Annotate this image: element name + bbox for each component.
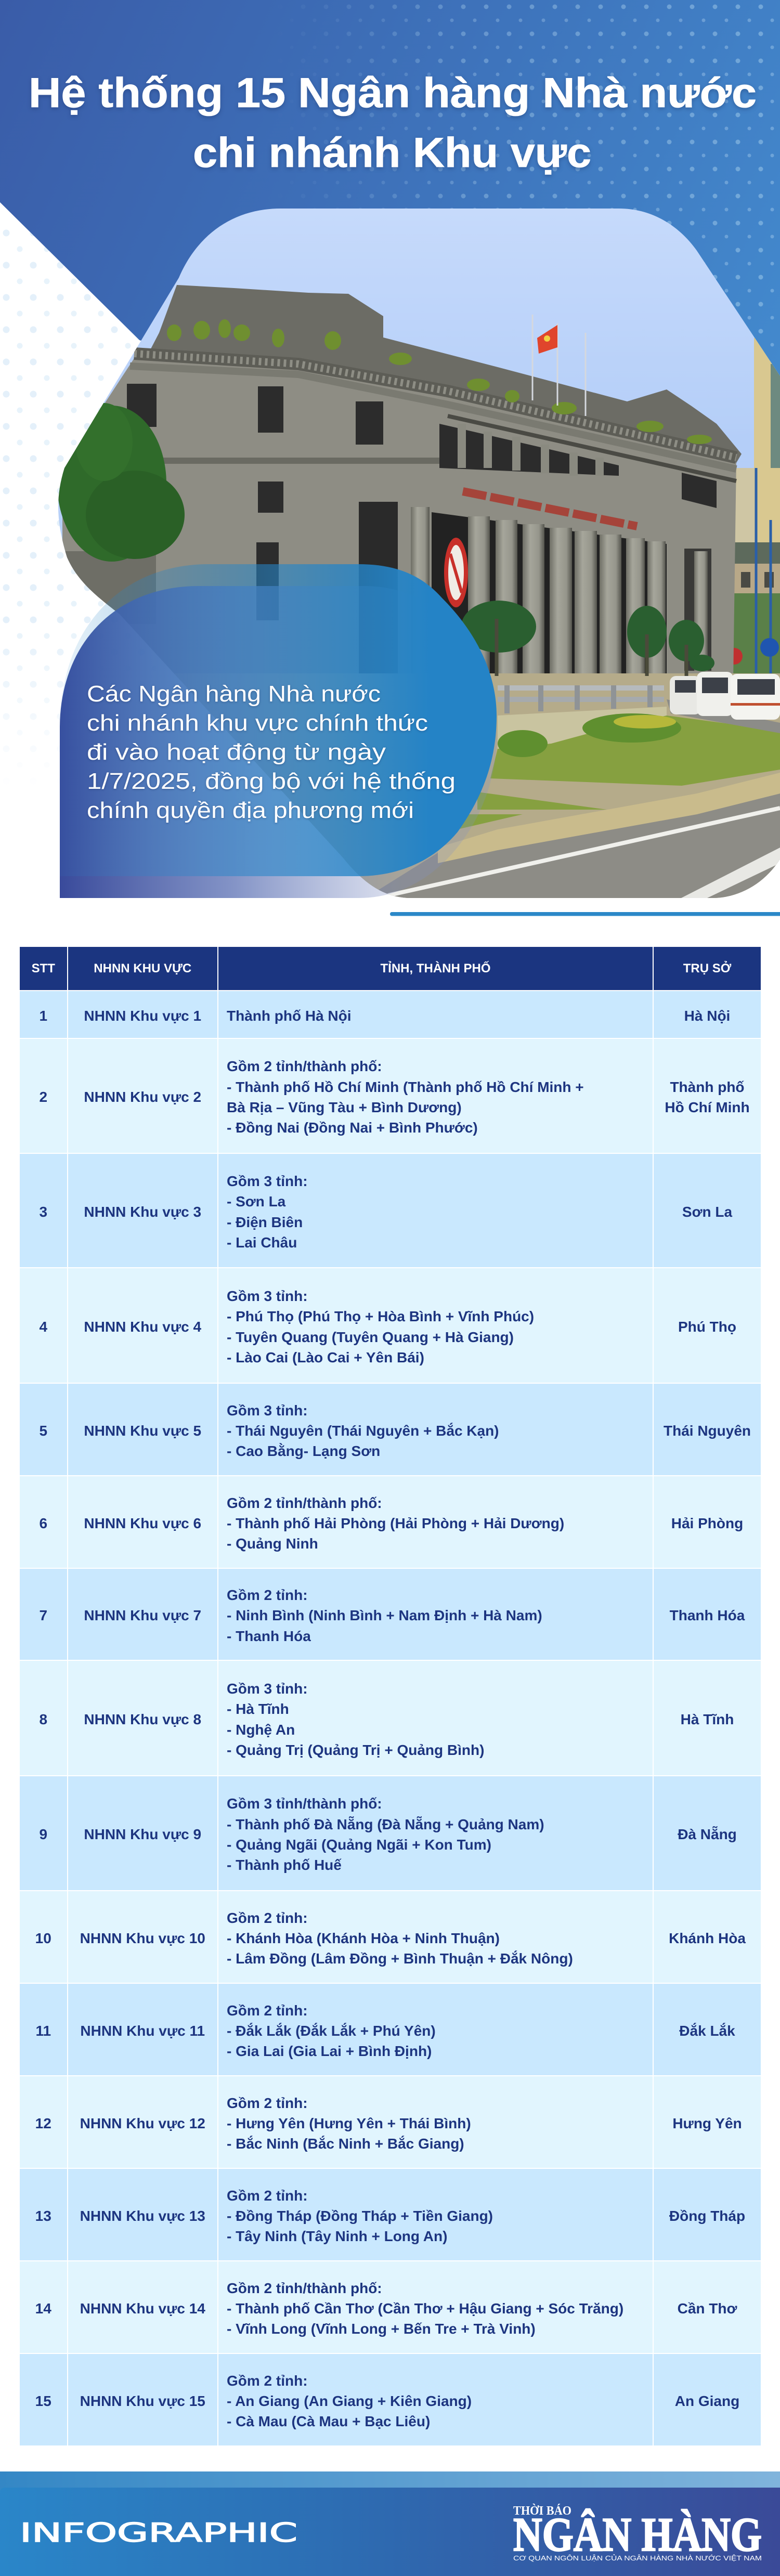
row 12: - Bắc Ninh (Bắc Ninh + Bắc Giang) <box>227 2136 464 2152</box>
row 1 <box>20 991 761 1038</box>
row 6: NHNN Khu vực 6 <box>84 1515 201 1531</box>
row 15: An Giang <box>675 2393 739 2409</box>
row 14: Gồm 2 tỉnh/thành phố: <box>227 2280 382 2296</box>
row 14: - Thành phố Cần Thơ (Cần Thơ + Hậu Giang + Sóc Trăng) <box>227 2300 623 2317</box>
row 4: NHNN Khu vực 4 <box>84 1319 201 1335</box>
upper windows <box>127 384 717 620</box>
row 13: - Tây Ninh (Tây Ninh + Long An) <box>227 2228 447 2244</box>
dark entrance <box>359 502 398 673</box>
row 15: - Cà Mau (Cà Mau + Bạc Liêu) <box>227 2413 430 2429</box>
callout panel <box>60 564 497 898</box>
row 10 <box>20 1891 761 1983</box>
title: chi nhánh Khu vực <box>193 129 591 176</box>
row 8: Hà Tĩnh <box>681 1711 734 1727</box>
callout text: chính quyền địa phương mới <box>87 798 414 823</box>
ground <box>181 673 780 898</box>
row 3: - Lai Châu <box>227 1234 297 1251</box>
row 3: - Sơn La <box>227 1193 285 1209</box>
row 1: Hà Nội <box>684 1008 730 1024</box>
row 13: - Đồng Tháp (Đồng Tháp + Tiền Giang) <box>227 2208 493 2224</box>
row 2: NHNN Khu vực 2 <box>84 1089 201 1105</box>
row 8: - Hà Tĩnh <box>227 1701 289 1717</box>
row 6: - Quảng Ninh <box>227 1536 318 1552</box>
row 7: - Ninh Bình (Ninh Bình + Nam Định + Hà Nam) <box>227 1607 542 1623</box>
row 13: NHNN Khu vực 13 <box>80 2208 205 2224</box>
row 5: NHNN Khu vực 5 <box>84 1423 201 1439</box>
row 5: Gồm 3 tỉnh: <box>227 1402 308 1419</box>
flag <box>532 315 586 416</box>
row 1: 1 <box>39 1008 47 1024</box>
row 10: Gồm 2 tỉnh: <box>227 1910 308 1926</box>
taxis <box>670 672 780 720</box>
row 4: Gồm 3 tỉnh: <box>227 1288 308 1304</box>
no entry sign <box>444 538 468 607</box>
row 4: 4 <box>39 1319 47 1335</box>
row 2: Hồ Chí Minh <box>665 1099 750 1115</box>
row 10: 10 <box>35 1930 51 1946</box>
upper colonnade strips <box>458 424 604 476</box>
row 10: NHNN Khu vực 10 <box>80 1930 205 1946</box>
inscription <box>463 491 637 526</box>
row 9: - Thành phố Huế <box>227 1857 342 1873</box>
row 9: - Thành phố Đà Nẵng (Đà Nẵng + Quảng Nam) <box>227 1816 544 1832</box>
row 11: 11 <box>35 2023 51 2039</box>
table header: NHNN KHU VỰC <box>94 961 191 975</box>
row 15: - An Giang (An Giang + Kiên Giang) <box>227 2393 472 2409</box>
row 5: 5 <box>39 1423 47 1439</box>
row 4: - Tuyên Quang (Tuyên Quang + Hà Giang) <box>227 1329 514 1345</box>
row 14: 14 <box>35 2300 51 2317</box>
row 14 <box>20 2261 761 2353</box>
hero section <box>0 0 780 916</box>
blue header background <box>0 0 780 406</box>
row 3 <box>20 1154 761 1267</box>
row 2: - Thành phố Hồ Chí Minh (Thành phố Hồ Chí Minh + <box>227 1079 584 1095</box>
row 7: - Thanh Hóa <box>227 1628 311 1644</box>
row 11: Gồm 2 tỉnh: <box>227 2002 308 2019</box>
row 15: Gồm 2 tỉnh: <box>227 2373 308 2389</box>
guard rail and barrier <box>498 685 664 713</box>
row 6: Hải Phòng <box>671 1515 743 1531</box>
row 4: Phú Thọ <box>678 1319 736 1335</box>
row 9: - Quảng Ngãi (Quảng Ngãi + Kon Tum) <box>227 1837 491 1853</box>
colonnade <box>432 512 667 673</box>
row 14: NHNN Khu vực 14 <box>80 2300 205 2317</box>
row 6: - Thành phố Hải Phòng (Hải Phòng + Hải Dương) <box>227 1515 564 1531</box>
row 8: Gồm 3 tỉnh: <box>227 1681 308 1697</box>
row 13: 13 <box>35 2208 51 2224</box>
row 2: Gồm 2 tỉnh/thành phố: <box>227 1058 382 1074</box>
row 11: NHNN Khu vực 11 <box>80 2023 205 2039</box>
callout text: đi vào hoạt động từ ngày <box>87 739 386 765</box>
footer <box>0 2471 780 2576</box>
row 5 <box>20 1384 761 1475</box>
row 9 <box>20 1776 761 1890</box>
callout text: Các Ngân hàng Nhà nước <box>87 681 381 707</box>
newspaper logo: THỜI BÁO <box>513 2504 571 2518</box>
row 15 <box>20 2354 761 2445</box>
row 11: Đắk Lắk <box>679 2023 735 2039</box>
shrubs <box>498 713 681 757</box>
row 2 <box>20 1039 761 1153</box>
newspaper logo: CƠ QUAN NGÔN LUẬN CỦA NGÂN HÀNG NHÀ NƯỚC VIỆT NAM <box>513 2554 762 2562</box>
left tree <box>57 403 185 624</box>
row 1: NHNN Khu vực 1 <box>84 1008 201 1024</box>
row 5: - Thái Nguyên (Thái Nguyên + Bắc Kạn) <box>227 1423 499 1439</box>
row 7: Thanh Hóa <box>670 1607 745 1623</box>
table header: STT <box>32 961 55 975</box>
row 4: - Lào Cai (Lào Cai + Yên Bái) <box>227 1349 424 1365</box>
title <box>29 70 757 176</box>
row 14: Cần Thơ <box>678 2300 737 2317</box>
row 12: 12 <box>35 2115 51 2131</box>
title: Hệ thống 15 Ngân hàng Nhà nước <box>29 70 757 116</box>
callout text <box>87 681 456 823</box>
row 8: - Quảng Trị (Quảng Trị + Quảng Bình) <box>227 1742 484 1758</box>
row 9: Đà Nẵng <box>678 1826 737 1842</box>
row 10: - Lâm Đồng (Lâm Đồng + Bình Thuận + Đắk Nông) <box>227 1950 573 1967</box>
row 4 <box>20 1268 761 1383</box>
building body <box>62 285 742 681</box>
row 15: NHNN Khu vực 15 <box>80 2393 205 2409</box>
row 13: Gồm 2 tỉnh: <box>227 2188 308 2204</box>
row 11: - Gia Lai (Gia Lai + Bình Định) <box>227 2043 432 2059</box>
row 5: Thái Nguyên <box>664 1423 751 1439</box>
row 11 <box>20 1984 761 2075</box>
row 7: Gồm 2 tỉnh: <box>227 1587 308 1603</box>
row 7 <box>20 1569 761 1660</box>
row 1: Thành phố Hà Nội <box>227 1008 352 1024</box>
row 8: - Nghệ An <box>227 1721 295 1738</box>
rooftop plants <box>167 319 712 444</box>
row 3: Gồm 3 tỉnh: <box>227 1173 308 1189</box>
row 7: NHNN Khu vực 7 <box>84 1607 201 1623</box>
row 6 <box>20 1476 761 1568</box>
row 6: 6 <box>39 1515 47 1531</box>
photo: State Bank building <box>52 208 780 902</box>
row 2: Bà Rịa – Vũng Tàu + Bình Dương) <box>227 1099 462 1115</box>
row 9: Gồm 3 tỉnh/thành phố: <box>227 1796 382 1812</box>
row 10: Khánh Hòa <box>669 1930 746 1946</box>
row 12: Hưng Yên <box>672 2115 742 2131</box>
row 2: Thành phố <box>670 1079 745 1095</box>
palm trees <box>461 601 714 676</box>
row 11: - Đắk Lắk (Đắk Lắk + Phú Yên) <box>227 2023 436 2039</box>
row 4: - Phú Thọ (Phú Thọ + Hòa Bình + Vĩnh Phúc) <box>227 1308 534 1324</box>
callout text: chi nhánh khu vực chính thức <box>87 710 428 736</box>
row 2: - Đồng Nai (Đồng Nai + Bình Phước) <box>227 1120 478 1136</box>
row 5: - Cao Bằng- Lạng Sơn <box>227 1443 380 1459</box>
row 3: 3 <box>39 1204 47 1220</box>
row 9: NHNN Khu vực 9 <box>84 1826 201 1842</box>
table header <box>20 947 761 990</box>
row 8: 8 <box>39 1711 47 1727</box>
right neighbouring building <box>733 338 780 673</box>
callout text: 1/7/2025, đồng bộ với hệ thống <box>87 769 456 794</box>
white dots left <box>3 230 131 720</box>
row 14: - Vĩnh Long (Vĩnh Long + Bến Tre + Trà Vinh) <box>227 2321 536 2337</box>
row 8 <box>20 1661 761 1775</box>
row 9: 9 <box>39 1826 47 1842</box>
row 12: NHNN Khu vực 12 <box>80 2115 205 2131</box>
table header: TỈNH, THÀNH PHỐ <box>381 961 491 975</box>
table header: TRỤ SỞ <box>683 961 731 975</box>
row 12 <box>20 2076 761 2168</box>
row 12: - Hưng Yên (Hưng Yên + Thái Bình) <box>227 2115 471 2131</box>
row 8: NHNN Khu vực 8 <box>84 1711 201 1727</box>
row 2: 2 <box>39 1089 47 1105</box>
row 3: - Điện Biên <box>227 1214 303 1230</box>
row 10: - Khánh Hòa (Khánh Hòa + Ninh Thuận) <box>227 1930 500 1946</box>
infographic label: INFOGRAPHIC <box>20 2518 297 2548</box>
row 13: Đồng Tháp <box>669 2208 745 2224</box>
row 12: Gồm 2 tỉnh: <box>227 2095 308 2111</box>
row 6: Gồm 2 tỉnh/thành phố: <box>227 1495 382 1511</box>
row 7: 7 <box>39 1607 47 1623</box>
row 3: NHNN Khu vực 3 <box>84 1204 201 1220</box>
row 15: 15 <box>35 2393 51 2409</box>
row 3: Sơn La <box>682 1204 732 1220</box>
row 13 <box>20 2169 761 2260</box>
